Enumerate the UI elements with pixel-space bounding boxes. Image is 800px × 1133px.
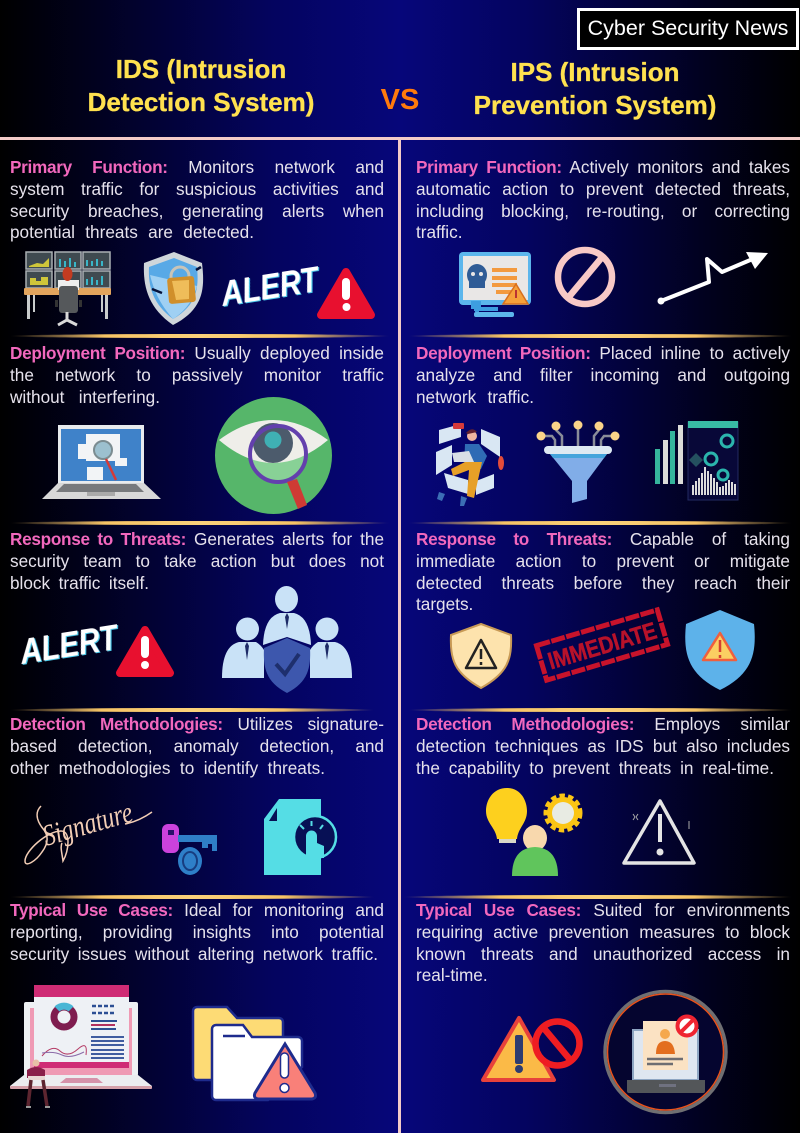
- text: IDS typical use cases: reporting, providing insights into potential: [10, 922, 384, 942]
- icon: prohibition sign: [558, 250, 612, 304]
- text: IPS detection methodologies: [416, 714, 790, 778]
- panel: IDS deployment position: [10, 343, 384, 514]
- title: IPS: IPS (Intrusion: [510, 57, 680, 87]
- title: IPS: [474, 57, 716, 120]
- icon: alert text and warning triangle: ALERT: [16, 618, 122, 672]
- text: IPS response to threats: immediate action to prevent or mitigate: [416, 551, 790, 571]
- text: IPS deployment position: analyze and filter incoming and outgoing: [416, 365, 790, 385]
- icon: signature: Signature: [39, 796, 136, 853]
- icon: document with touch: [264, 799, 336, 875]
- text: IDS primary function: system traffic for suspicious activities and: [10, 179, 384, 199]
- text: IDS detection methodologies: based detection, anomaly detection, and: [10, 736, 384, 756]
- text: IDS primary function: security breaches, generating alerts when: [10, 201, 384, 221]
- text: IPS detection methodologies: detection techniques as IDS but also includes: [416, 736, 790, 756]
- text: IDS primary function: [10, 157, 384, 242]
- title: IDS: IDS (Intrusion: [116, 54, 286, 84]
- text: IDS typical use cases: security issues without altering network traffic.: [10, 944, 378, 964]
- panel: IPS typical use cases: [416, 900, 790, 1114]
- text: IPS typical use cases: real-time.: [416, 965, 488, 985]
- text: IDS detection methodologies: Detection Methodologies: Utilizes signature-: [10, 714, 384, 734]
- text: IPS primary function: including blocking, re-routing, or correcting: [416, 201, 790, 221]
- icon: immediate stamp: IMMEDIATE: [545, 618, 660, 675]
- icon: bars and data panel: [655, 421, 738, 500]
- icon: team with shield: [222, 586, 352, 693]
- text: IDS typical use cases: Typical Use Cases: Ideal for monitoring and: [10, 900, 384, 920]
- panel: IPS primary function: [416, 157, 790, 317]
- text: IDS deployment position: the network to passively monitor traffic: [10, 365, 384, 385]
- text: IPS detection methodologies: Detection Methodologies: Employs similar: [416, 714, 790, 734]
- text: IPS primary function: [416, 157, 790, 242]
- text: IPS deployment position: network traffic.: [416, 387, 534, 407]
- text: IPS deployment position: [416, 343, 790, 407]
- panel: IDS detection methodologies: [10, 714, 384, 875]
- text: IPS response to threats: targets.: [416, 594, 473, 614]
- icon: rising arrow: [658, 252, 768, 304]
- brand logo: Cyber Security News: [588, 16, 788, 40]
- text: IDS deployment position: without interfering.: [10, 387, 160, 407]
- panel: IPS deployment position: [416, 343, 790, 506]
- icon: eye under magnifying glass: [215, 397, 332, 514]
- header: [88, 8, 799, 120]
- text: IPS response to threats: Response to Threats: Capable of taking: [416, 529, 790, 549]
- text: IPS response to threats: detected threats before they reach their: [416, 573, 790, 593]
- text: IPS typical use cases: requiring active prevention measures to block: [416, 922, 790, 942]
- text: IDS response to threats: block traffic itself.: [10, 573, 149, 593]
- panel: IDS typical use cases: [10, 900, 384, 1108]
- title: IPS: Prevention System): [474, 90, 716, 120]
- text: IDS response to threats: security team to take action but does not: [10, 551, 384, 571]
- text: IPS primary function: traffic.: [416, 222, 462, 242]
- text: IPS detection methodologies: the capability to prevent threats in real-time.: [416, 758, 774, 778]
- icon: folders with warning: [193, 1007, 316, 1100]
- icon: signature: [25, 796, 152, 864]
- icon: person with floating screens: [436, 423, 504, 506]
- icon: key with fingerprint: [162, 824, 217, 875]
- icon: warning shield: [451, 624, 511, 688]
- panel: IPS detection methodologies: [416, 714, 790, 876]
- panel: IPS response to threats: [416, 529, 790, 690]
- title: IDS: Detection System): [88, 87, 314, 117]
- icon: blocked user on laptop in ring: [605, 992, 726, 1112]
- text: IDS deployment position: [10, 343, 384, 407]
- text: IPS primary function: automatic action to prevent detected threats,: [416, 179, 790, 199]
- icon: warning and ban sign: [483, 1018, 580, 1080]
- text: IPS typical use cases: [416, 900, 790, 985]
- icon: shield with padlock: [144, 252, 203, 325]
- brand logo: [577, 8, 799, 50]
- text: IPS response to threats: [416, 529, 790, 614]
- icon: idea person with gear: [486, 788, 579, 876]
- icon: security operator at monitors: [24, 252, 111, 325]
- title: IDS: [88, 54, 314, 117]
- text: IDS typical use cases: [10, 900, 384, 964]
- icon: dashboard laptop: [10, 985, 152, 1107]
- icon: alert text and warning triangle: ALERT: [217, 260, 323, 314]
- icon: monitor with threat: [459, 252, 531, 317]
- text: IPS deployment position: Deployment Position: Placed inline to actively: [416, 343, 790, 363]
- text: IPS typical use cases: Typical Use Cases: Suited for environments: [416, 900, 790, 920]
- versus label: VS: [381, 84, 419, 116]
- text: IDS response to threats: [10, 529, 384, 593]
- icon: blue alert shield: [685, 610, 755, 690]
- text: IDS detection methodologies: [10, 714, 384, 778]
- icon: filter funnel: [536, 420, 620, 503]
- text: IDS primary function: Primary Function: Monitors network and: [10, 157, 384, 177]
- text: IPS typical use cases: known threats and unauthorized access in: [416, 944, 790, 964]
- text: IDS deployment position: Deployment Position: Usually deployed inside: [10, 343, 384, 363]
- icon: warning outline: [624, 801, 694, 863]
- panel: IDS primary function: [10, 157, 384, 326]
- panel: IDS response to threats: [10, 529, 384, 693]
- text: IDS response to threats: Response to Threats: Generates alerts for the: [10, 529, 384, 549]
- text: IPS primary function: Primary Function: Actively monitors and takes: [416, 157, 790, 177]
- text: IDS primary function: potential threats are detected.: [10, 222, 254, 242]
- text: IDS detection methodologies: other methodologies to identify threats.: [10, 758, 325, 778]
- icon: laptop with magnifier: [42, 425, 161, 499]
